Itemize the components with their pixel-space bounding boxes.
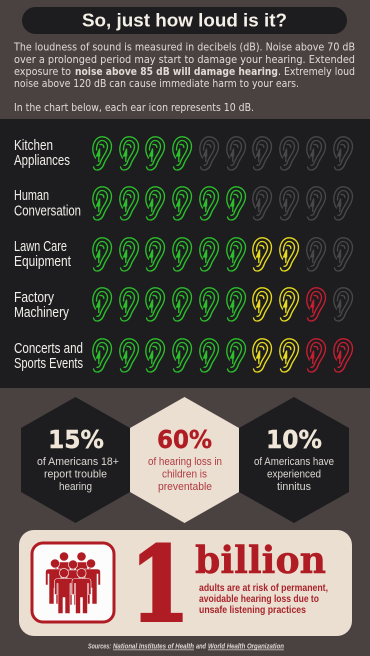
intro text block: exposure to (14, 65, 71, 78)
row: human conversation: Human (14, 188, 49, 204)
sources: World Health Organization (208, 644, 284, 650)
row: concerts and sports events (14, 339, 352, 372)
stat hexagon: 15%: report trouble (44, 468, 107, 480)
row: kitchen appliances: Kitchen (14, 138, 53, 154)
sources: National Institutes of Health (113, 644, 194, 650)
stat hexagon: 10%: experienced (267, 468, 321, 480)
callout text (199, 583, 328, 616)
sources (88, 644, 284, 650)
callout text: unsafe listening practices (199, 605, 306, 616)
intro text block: noise above 120 dB can cause immediate harm to your ears. (14, 77, 299, 90)
callout text: avoidable hearing loss due to (199, 594, 319, 605)
title: So, just how loud is it? (82, 10, 287, 31)
stat hexagon: 60% (130, 397, 239, 523)
row: kitchen appliances: Appliances (14, 153, 70, 169)
icon: group of people (32, 543, 114, 622)
big number 1: 1 (130, 524, 190, 646)
stat hexagon: 10%: 10% (266, 425, 322, 454)
row: factory machinery: Machinery (14, 305, 70, 321)
row: human conversation: Conversation (14, 204, 81, 220)
title (22, 7, 347, 34)
sources: Sources: (88, 644, 111, 650)
intro text block: . Extremely loud (278, 65, 355, 78)
row: factory machinery (14, 288, 352, 321)
row: concerts and sports events: Concerts and (14, 341, 83, 357)
sources: and (196, 644, 207, 650)
row: lawn care equipment: Lawn Care (14, 239, 67, 255)
panel: decibel ear chart (0, 119, 370, 388)
stat hexagon: 10% (239, 397, 349, 523)
stat hexagon: 60%: preventable (158, 481, 212, 493)
row: factory machinery: Factory (14, 290, 55, 306)
callout text: adults are at risk of permanent, (199, 583, 328, 594)
stat hexagon: 15%: of Americans 18+ (37, 456, 119, 468)
panel: 1 billion callout (19, 524, 352, 646)
stat hexagon: 15%: 15% (48, 425, 104, 454)
row: concerts and sports events: Sports Events (14, 356, 83, 372)
stat hexagon: 60%: children is (162, 468, 207, 480)
row: lawn care equipment: Equipment (14, 254, 71, 270)
stat hexagon: 10%: of Americans have (254, 456, 334, 468)
stat hexagon: 60%: 60% (157, 425, 212, 454)
stat hexagon: 60%: of hearing loss in (148, 456, 222, 468)
stat hexagon: 10%: tinnitus (277, 481, 311, 493)
billion heading: billion (195, 538, 326, 582)
stat hexagon: 15% (21, 397, 130, 523)
row: human conversation (14, 187, 352, 220)
intro text block: In the chart below, each ear icon represents 10 dB. (14, 101, 254, 114)
intro text block (13, 40, 355, 114)
row: lawn care equipment (14, 238, 352, 271)
intro text block: noise above 85 dB will damage hearing (75, 65, 278, 78)
stat hexagon: 15%: hearing (59, 481, 92, 493)
row: kitchen appliances (14, 137, 352, 170)
